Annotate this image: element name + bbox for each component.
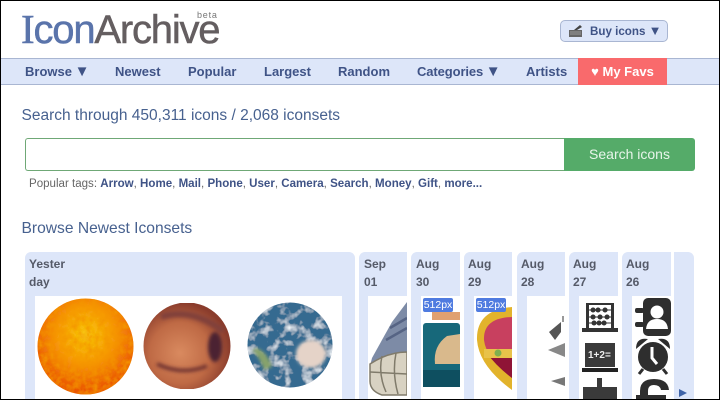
nav: random: Random	[338, 64, 390, 79]
search input	[25, 138, 565, 171]
icon: clipboard	[583, 378, 617, 399]
icon: mars	[144, 303, 230, 389]
date: aug 27: 27	[573, 275, 586, 289]
nav: artists: Artists	[526, 64, 567, 79]
icon: cart	[569, 25, 582, 37]
icon: sun	[38, 298, 134, 394]
section heading: Browse Newest Iconsets	[22, 220, 192, 237]
panel: yesterday	[25, 252, 355, 399]
panel: aug 30	[411, 252, 460, 399]
date: aug 27	[573, 257, 596, 289]
icon: blackboard	[582, 343, 618, 372]
buy icons text: Buy icons ▼	[590, 23, 662, 38]
icon: address book	[635, 298, 671, 336]
date: yesterday: Yester	[29, 257, 65, 271]
search heading: Search through 450,311 icons / 2,068 iconsets	[22, 107, 340, 124]
date: aug 30: Aug	[416, 257, 439, 271]
date: aug 28: Aug	[521, 257, 544, 271]
image: aug 27	[579, 296, 618, 399]
date: aug 29: Aug	[468, 257, 491, 271]
popular tags: Popular tags: Arrow, Home, Mail, Phone, User, Camera, Search, Money, Gift, more...	[29, 178, 482, 190]
icon: abacus	[582, 303, 618, 332]
date: aug 26: 26	[626, 275, 639, 289]
image: aug 26	[632, 296, 671, 399]
date: aug 29	[468, 257, 491, 289]
date: aug 30: 30	[416, 275, 429, 289]
badge: 512px: 512px	[424, 299, 452, 311]
arrow: next	[679, 389, 687, 397]
date: yesterday	[29, 257, 65, 289]
icon: padlock	[636, 379, 669, 399]
date: aug 26	[626, 257, 649, 289]
search button	[564, 138, 695, 171]
nav: browse: Browse ▼	[25, 63, 89, 80]
icon: blackboard: 1+2=	[588, 350, 611, 361]
image: sep 01	[368, 296, 407, 399]
icon: game box	[423, 312, 460, 387]
nav: my favs	[578, 58, 667, 85]
icon: creature	[369, 302, 407, 396]
date: aug 26: Aug	[626, 257, 649, 271]
date: sep 01: Sep	[364, 257, 386, 271]
panel: aug 29	[464, 252, 512, 399]
icon: devices	[548, 316, 565, 386]
panel: aug 27	[569, 252, 618, 399]
date: aug 28: 28	[521, 275, 534, 289]
icon: earth	[248, 302, 332, 388]
panel: sep 01	[359, 252, 407, 399]
search button: Search icons	[589, 146, 670, 162]
nav: categories: Categories ▼	[417, 63, 500, 80]
panel: more	[674, 252, 694, 399]
date: sep 01: 01	[364, 275, 377, 289]
buy icons button	[560, 20, 668, 42]
image: aug 30	[421, 296, 460, 399]
icon: alarm clock	[636, 338, 670, 375]
date: yesterday: day	[29, 275, 50, 289]
date: aug 30	[416, 257, 439, 289]
beta label: beta	[197, 10, 218, 20]
icon: heart shield	[476, 307, 512, 390]
panel: aug 28	[517, 252, 565, 399]
logo: IconArchive	[21, 6, 219, 52]
panel: aug 26	[622, 252, 671, 399]
image: aug 29	[474, 296, 512, 399]
date: aug 28	[521, 257, 544, 289]
nav: newest: Newest	[115, 64, 161, 79]
nav: my favs: ♥ My Favs	[591, 64, 654, 79]
date: aug 29: 29	[468, 275, 481, 289]
planets image area	[35, 296, 342, 399]
badge: 512px: 512px	[477, 299, 505, 311]
nav: largest: Largest	[264, 64, 311, 79]
navigation bar	[1, 58, 719, 85]
date: aug 27: Aug	[573, 257, 596, 271]
nav: popular: Popular	[188, 64, 236, 79]
image: aug 28	[527, 296, 565, 399]
date: sep 01	[364, 257, 386, 289]
